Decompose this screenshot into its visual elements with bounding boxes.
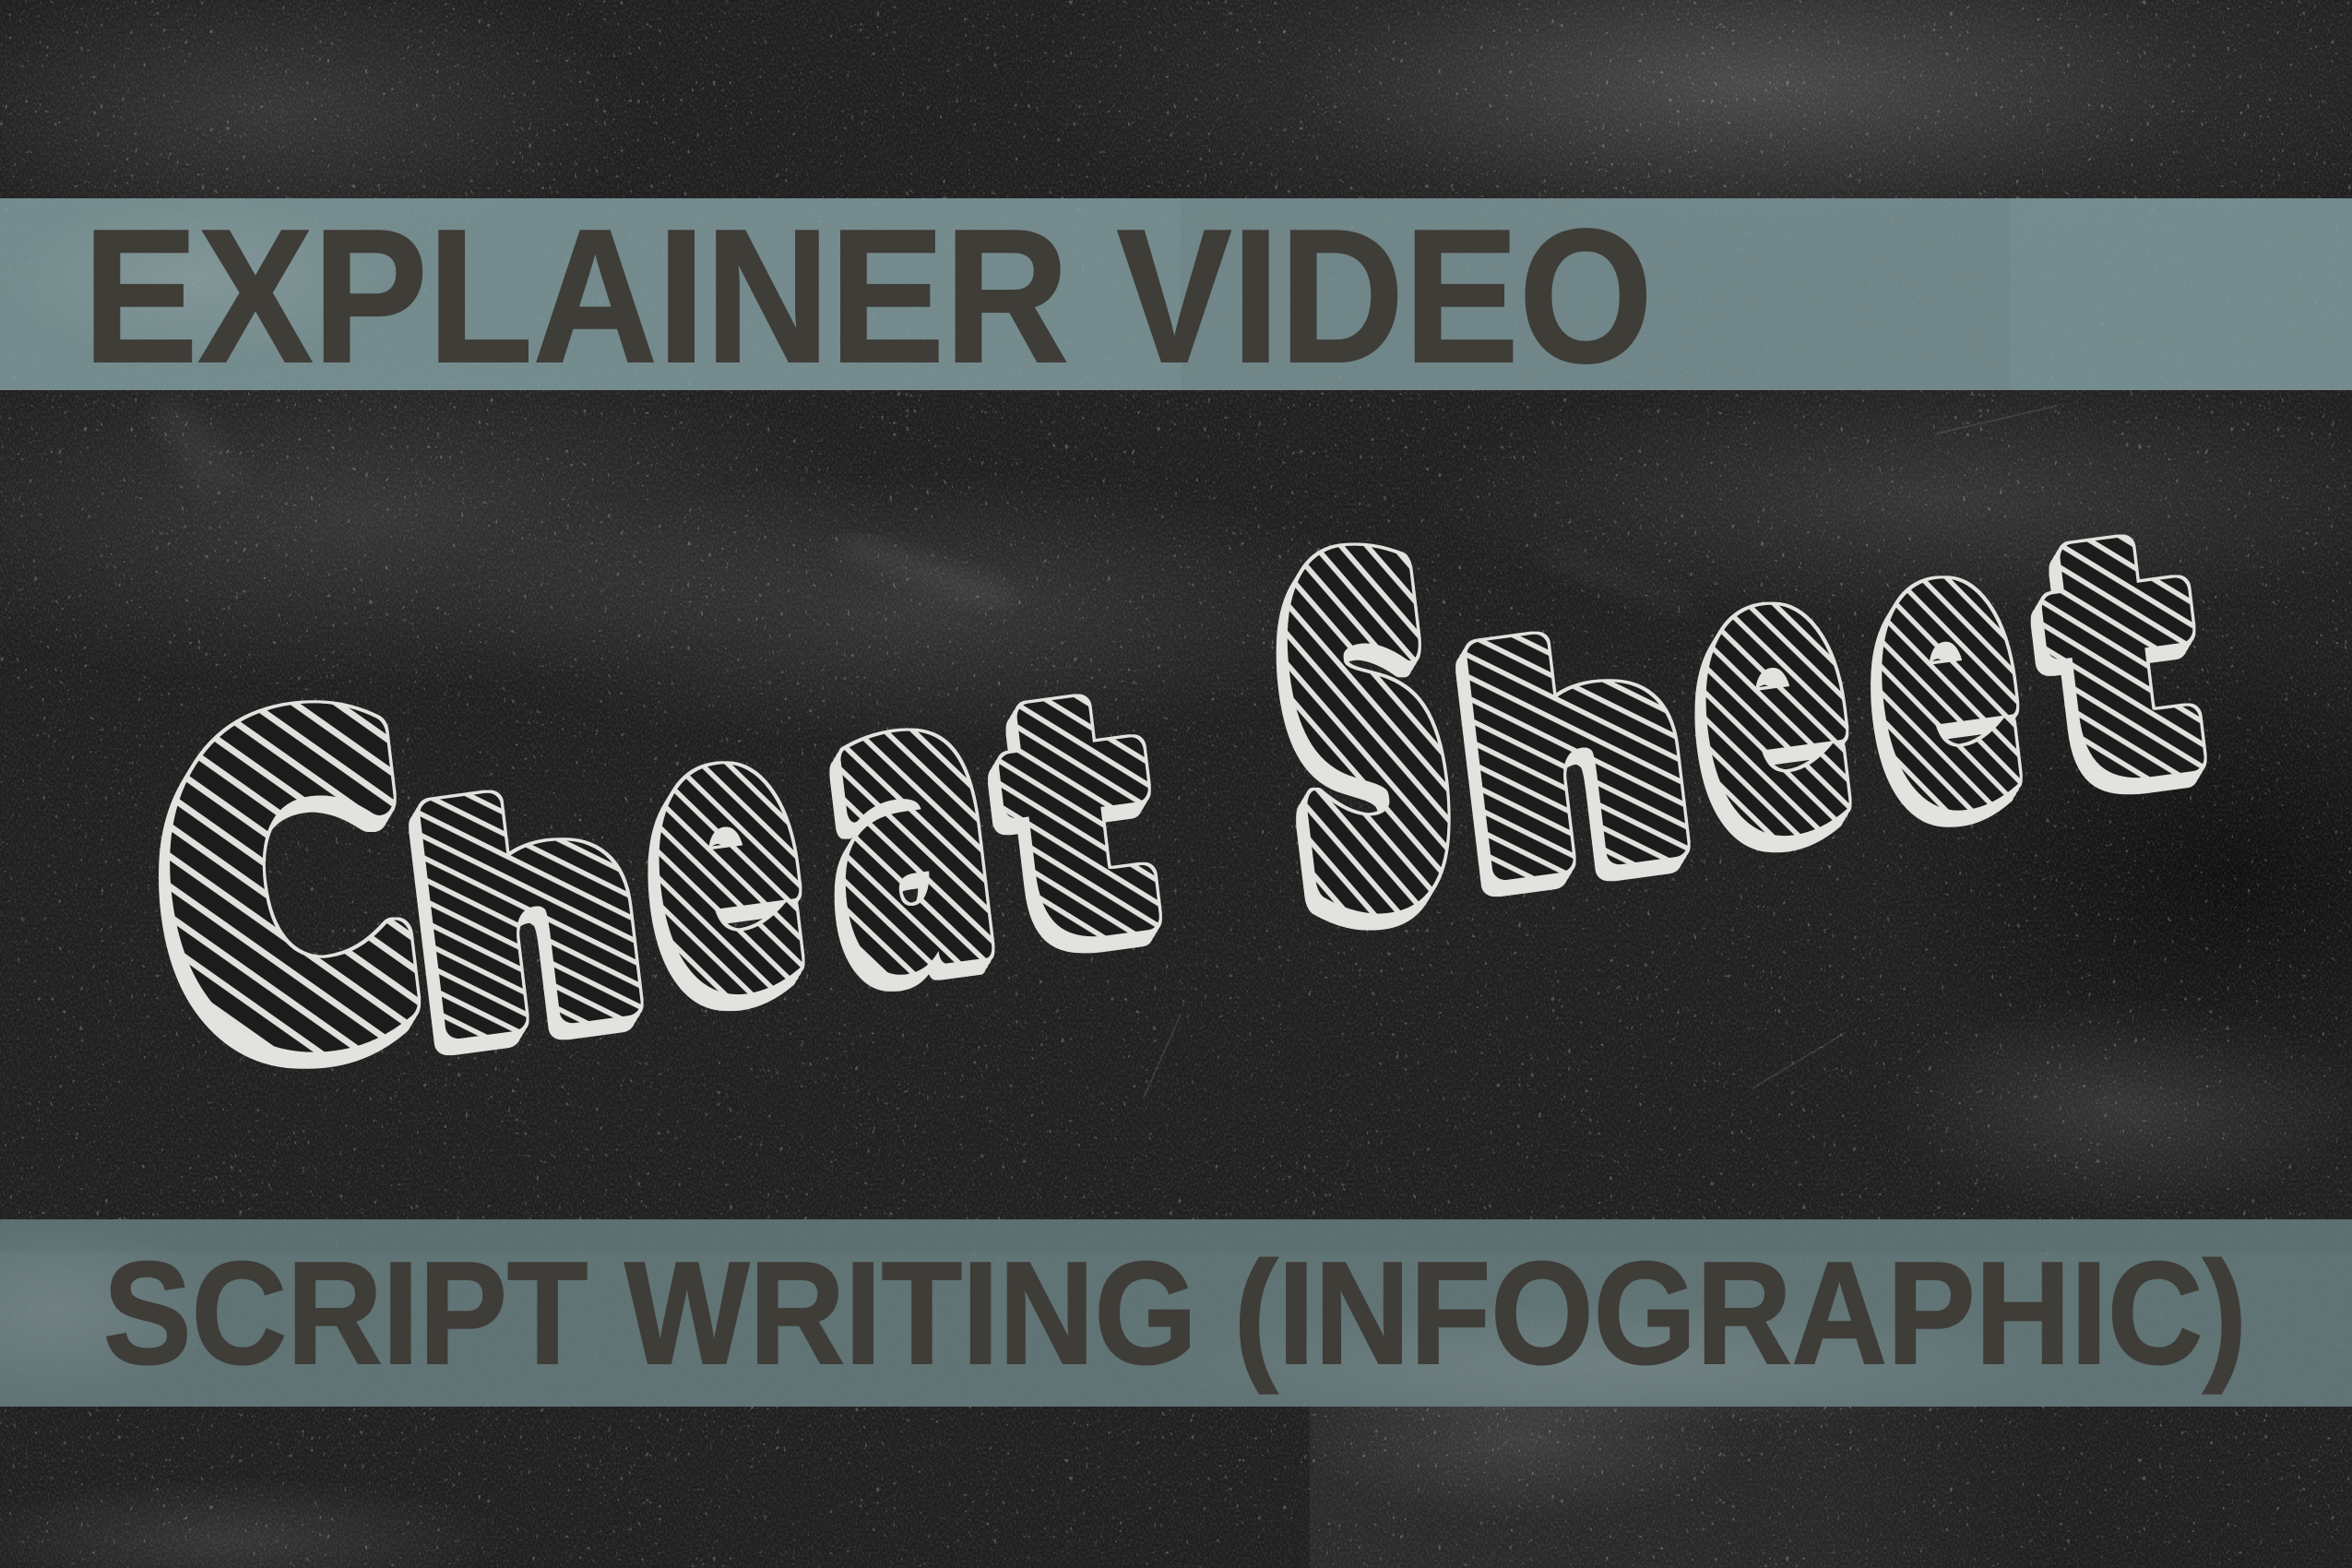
chalk title: Sheet: h [1449,581,1705,937]
chalk title: Sheet: S [1263,474,1475,1000]
chalk title: Cheat: a [809,594,1014,1055]
chalk title: Sheet [1263,445,2211,1000]
chalk title: Cheat: h [402,740,659,1096]
bottom banner [0,1218,2352,1430]
chalk title: Cheat [143,594,1166,1144]
chalk title: Cheat: C [143,636,437,1144]
top banner [0,190,2352,402]
chalk title: Sheet: e [1676,472,1871,918]
chalk title: Sheet: t [2037,475,2211,846]
chalk title: Cheat: e [629,630,824,1075]
chalk title: Sheet: e [1851,445,2041,892]
heading: explainer video: EXPLAINER VIDEO [83,190,1653,402]
chalk title: Cheat: t [994,636,1166,1004]
